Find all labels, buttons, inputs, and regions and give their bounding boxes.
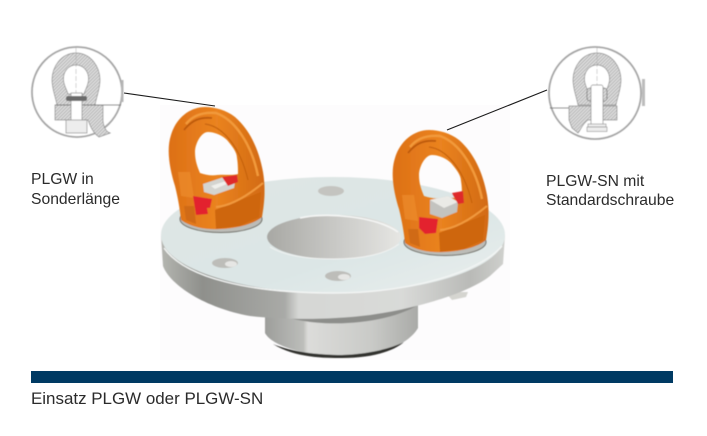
lower boss (265, 292, 468, 358)
leader line left (124, 93, 215, 106)
bolt left (71, 93, 82, 121)
label: PLGW-SN mit Standardschraube: Standardschraube (546, 192, 674, 209)
caption bar (31, 371, 673, 383)
right red locks (419, 217, 438, 234)
left red locks (193, 196, 212, 215)
caption: Einsatz PLGW oder PLGW-SN (31, 389, 263, 408)
plate section right (569, 106, 617, 133)
label: PLGW-SN mit Standardschraube: PLGW-SN mit (546, 173, 645, 190)
photo backdrop (160, 105, 510, 360)
flange plate (161, 177, 505, 358)
label: PLGW in Sonderlänge: PLGW in (31, 171, 94, 188)
collar right (587, 88, 607, 101)
right bolt head (430, 196, 458, 218)
centre bore (267, 215, 401, 259)
right eye bolt (393, 130, 489, 256)
detail circle: PLGW-SN (549, 47, 645, 139)
label: PLGW in Sonderlänge: Sonderlänge (31, 191, 120, 208)
bolt holes (318, 186, 344, 196)
plate top face (161, 177, 505, 293)
leader line right (447, 90, 547, 130)
bolt right (591, 85, 603, 126)
detail circle: PLGW (32, 47, 124, 137)
illustration: flange plate with two eye bolts (161, 107, 505, 358)
left eye bolt (169, 107, 265, 232)
plate rim (161, 235, 505, 319)
plate section left (55, 105, 110, 137)
left bolt head (203, 177, 235, 195)
